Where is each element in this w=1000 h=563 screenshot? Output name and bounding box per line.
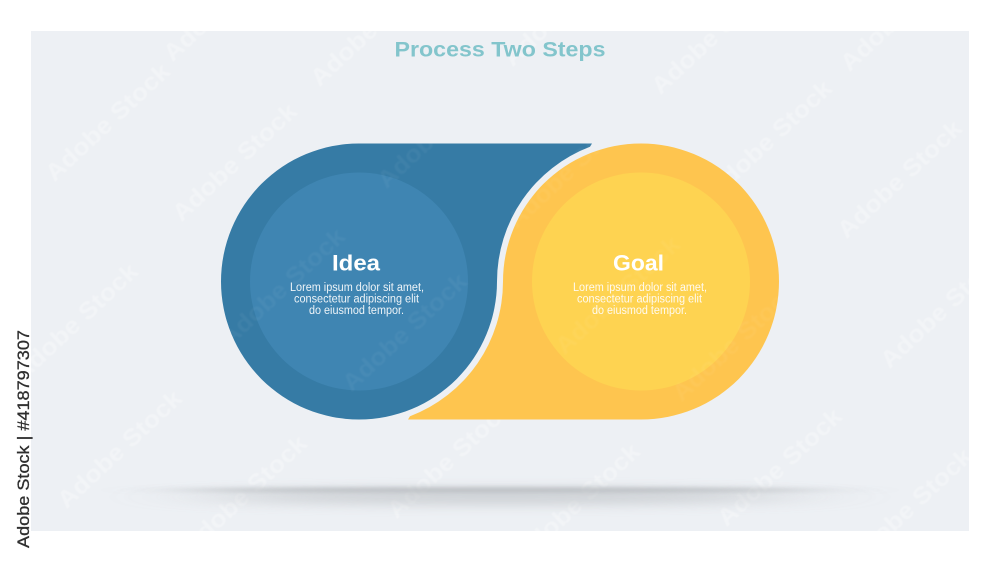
blue teardrop shape: [221, 144, 592, 420]
yellow teardrop shape: [408, 144, 779, 420]
inner blue circle: [250, 172, 468, 390]
watermarks over shapes: Adobe Stock: [337, 268, 473, 397]
idea description: Lorem ipsum dolor sit amet,: [290, 282, 424, 294]
watermarks over shapes: Adobe Stock: [667, 278, 803, 407]
heading: Goal: Goal: [613, 250, 664, 276]
watermarks on panel: Adobe Stock: [167, 98, 303, 227]
goal description: do eiusmod tempor.: [592, 305, 687, 317]
heading: Idea: Idea: [332, 250, 381, 276]
watermarks on panel: Adobe Stock: [177, 430, 313, 559]
watermarks on panel: Adobe Stock: [832, 115, 968, 244]
floor shadow: [170, 488, 830, 504]
title: Process Two Steps: [394, 38, 606, 62]
step 2: goal: [408, 144, 779, 420]
watermarks over shapes: [215, 65, 803, 407]
watermarks on panel: Adobe Stock: [875, 245, 1000, 374]
idea description: consectetur adipiscing elit: [294, 294, 420, 306]
watermarks on panel: Adobe Stock: [8, 258, 144, 387]
goal description: [573, 282, 707, 317]
watermarks on panel: Adobe Stock: [52, 385, 188, 514]
watermarks on panel: Adobe Stock: [382, 395, 518, 524]
stock id side label: Adobe Stock | #418797307: [14, 330, 33, 548]
watermarks over shapes: Adobe Stock: [550, 231, 686, 360]
goal description: Lorem ipsum dolor sit amet,: [573, 282, 707, 294]
watermarks on panel: Adobe Stock: [702, 75, 838, 204]
watermarks over shapes: Adobe Stock: [215, 223, 351, 352]
watermarks over shapes: Adobe Stock: [502, 105, 638, 234]
idea description: do eiusmod tempor.: [309, 305, 404, 317]
watermarks over shapes: Adobe Stock: [372, 65, 508, 194]
inner yellow circle: [532, 172, 750, 390]
step 1: idea: [221, 144, 592, 420]
watermarks on panel: Adobe Stock: [40, 58, 176, 187]
goal description: consectetur adipiscing elit: [577, 294, 703, 306]
watermarks on panel: Adobe Stock: [712, 403, 848, 532]
idea description: [290, 282, 424, 317]
